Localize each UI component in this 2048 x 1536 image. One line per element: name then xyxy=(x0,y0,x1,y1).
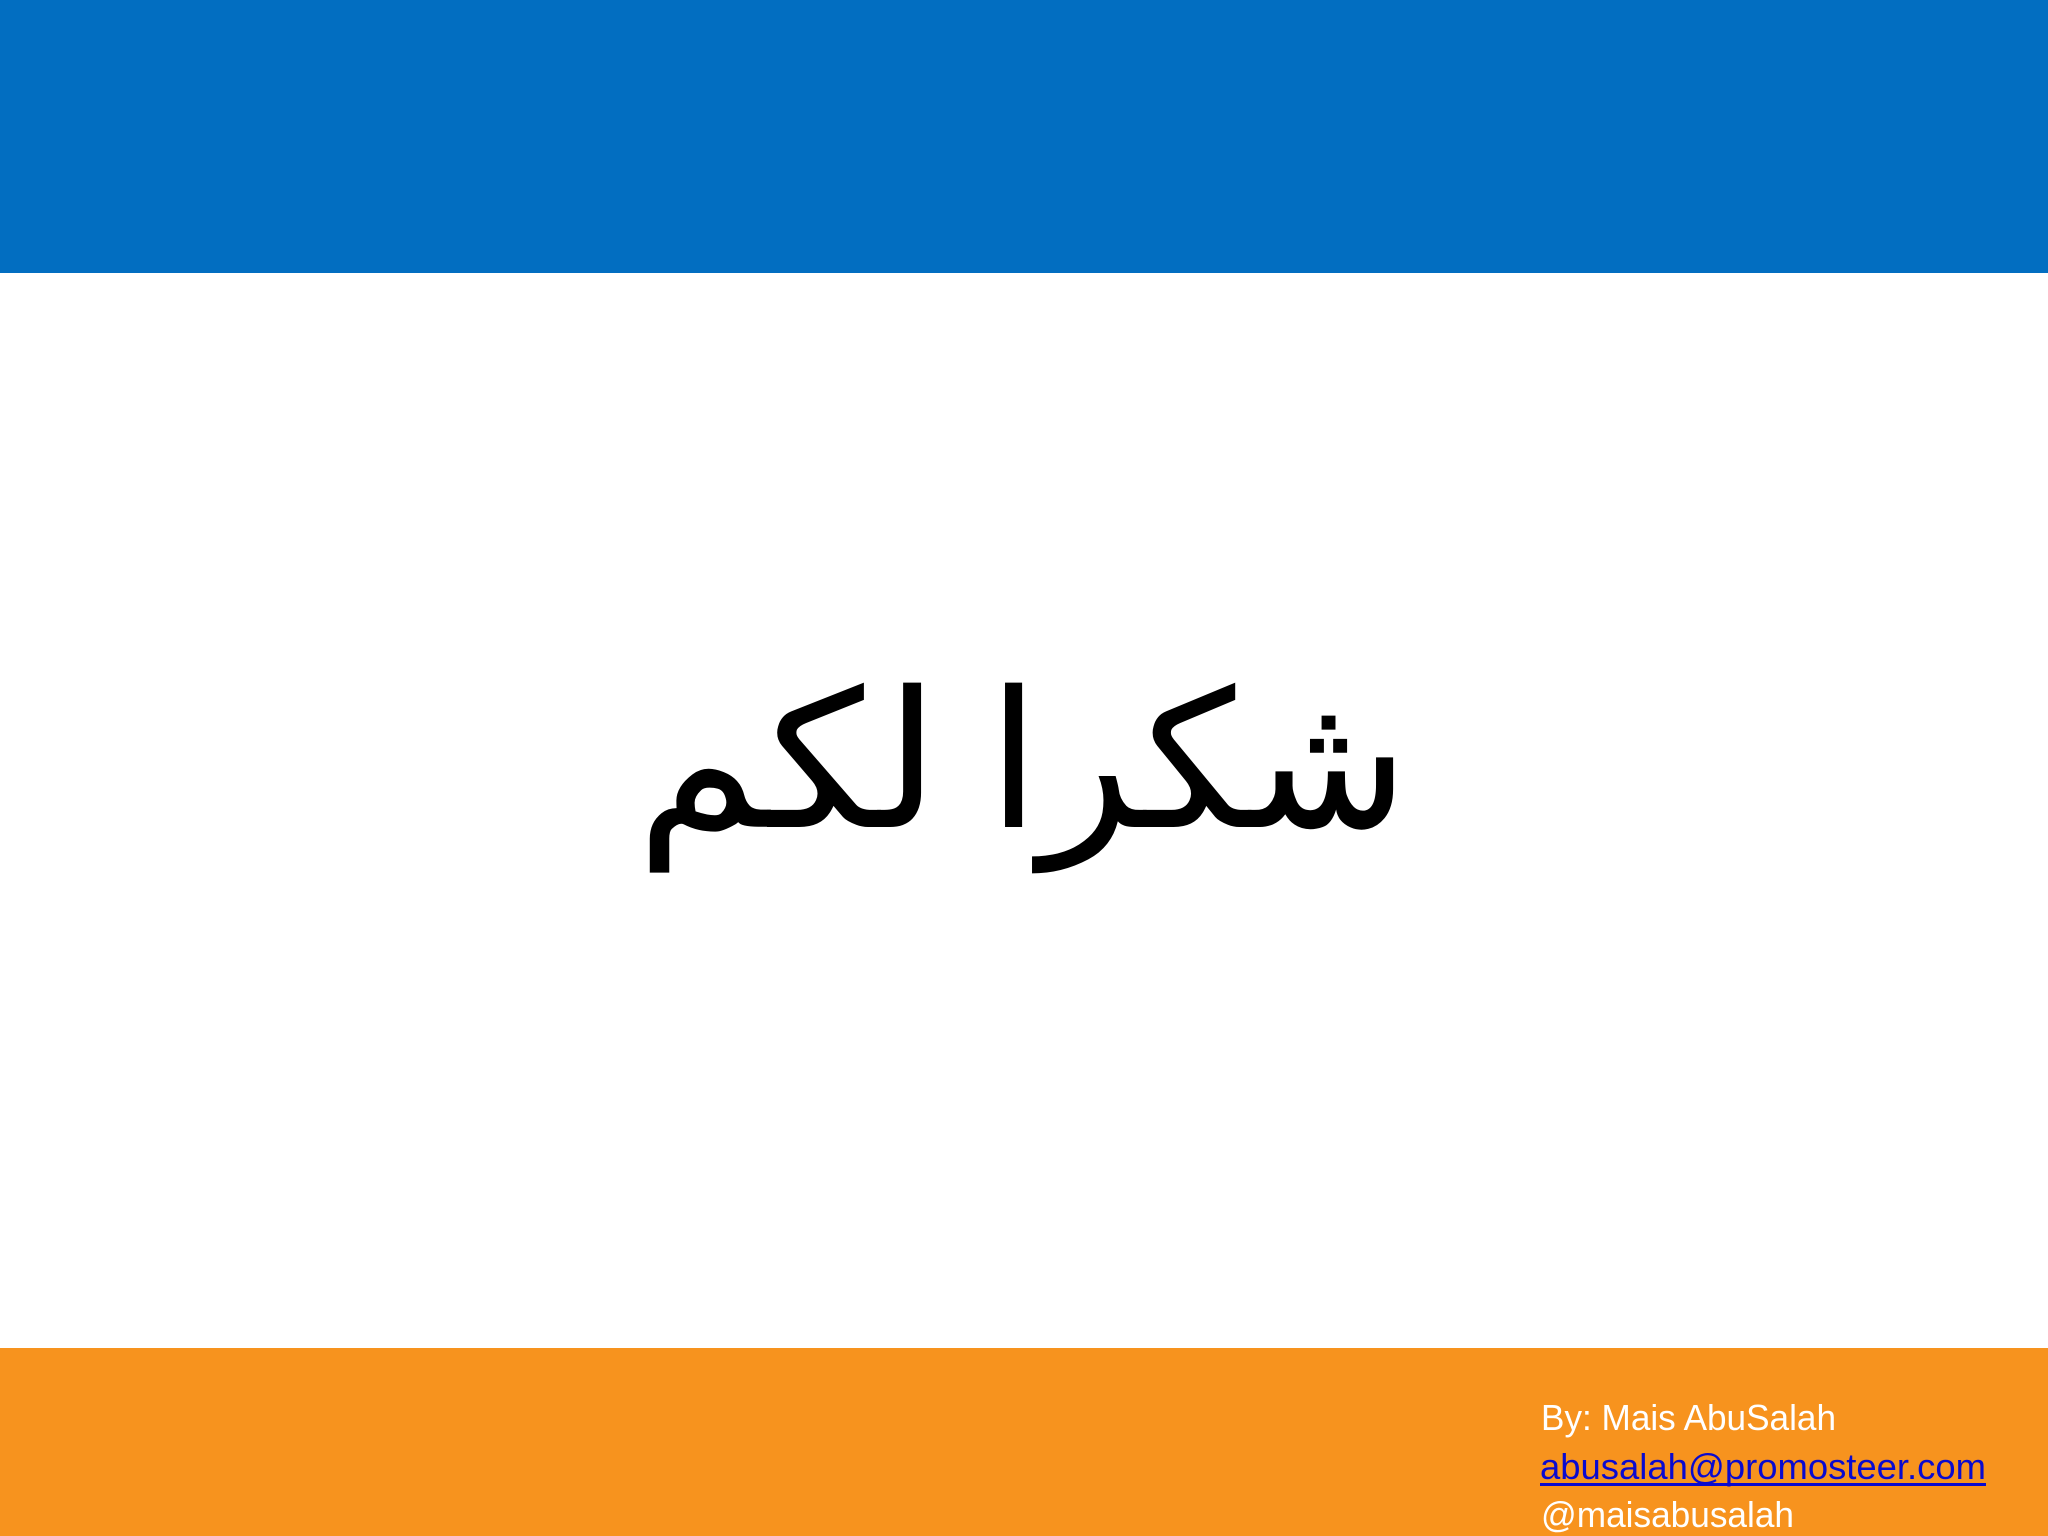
author credits xyxy=(1540,1397,1986,1535)
title: thank you xyxy=(636,650,1409,874)
title: thank you: لكم xyxy=(636,650,940,874)
social handle: @maisabusalah xyxy=(1541,1494,1794,1535)
footer band xyxy=(0,1348,2048,1536)
title: thank you: شكرا xyxy=(987,651,1409,874)
email link: abusalah@promosteer.com xyxy=(1540,1446,1986,1487)
header band xyxy=(0,0,2048,273)
author name: By: Mais AbuSalah xyxy=(1541,1397,1836,1438)
